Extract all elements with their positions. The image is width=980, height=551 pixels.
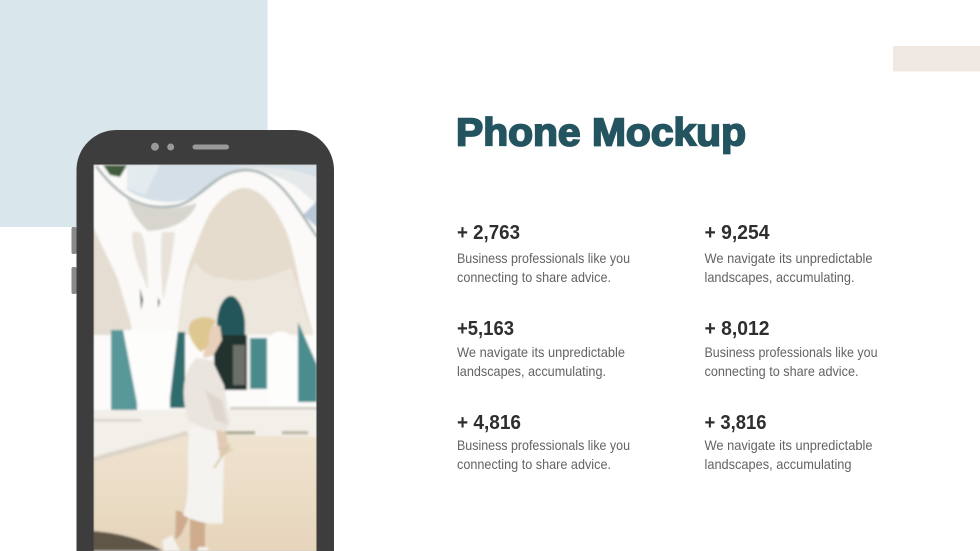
stat: +8,012: Business professionals like you xyxy=(704,345,878,360)
stat: +2,763 xyxy=(457,222,630,285)
dark arched doorway xyxy=(217,296,245,345)
stat: +9,254 xyxy=(704,222,872,285)
stat: +5,163: landscapes, accumulating. xyxy=(457,364,606,379)
right teal shutters xyxy=(250,338,267,389)
left teal shutters xyxy=(111,330,137,411)
white arch column strands xyxy=(132,232,175,300)
stat: +4,816 xyxy=(457,412,630,472)
main arch interior xyxy=(178,188,313,345)
stat: +5,163: +5,163 xyxy=(457,318,514,340)
sky and canopy xyxy=(127,165,318,205)
stat: +2,763: connecting to share advice. xyxy=(457,270,611,285)
arch lower wall xyxy=(179,264,312,335)
column overlay xyxy=(122,328,180,402)
woman's shoes xyxy=(162,535,180,551)
title: Phone Mockup xyxy=(456,112,746,154)
stat: +2,763: + 2,763 xyxy=(457,222,520,244)
door light xyxy=(233,345,245,385)
stat: +5,163: We navigate its unpredictable xyxy=(457,345,625,360)
stat: +3,816: landscapes, accumulating xyxy=(704,457,852,472)
photo: woman in front of white arches xyxy=(93,164,318,551)
stat: +3,816: + 3,816 xyxy=(704,412,766,434)
phone mockup xyxy=(72,130,334,551)
canopy underside xyxy=(127,198,197,231)
stat: +9,254: + 9,254 xyxy=(704,222,770,244)
phone camera and speaker xyxy=(151,143,229,151)
phone body xyxy=(76,130,334,551)
dark gaps beside column xyxy=(140,288,160,310)
sandy ground xyxy=(93,434,318,551)
stat: +3,816: We navigate its unpredictable xyxy=(704,438,872,453)
shadow xyxy=(93,531,163,551)
left arch interior xyxy=(94,228,132,336)
woman's neck and face xyxy=(203,326,222,358)
stat: +2,763: Business professionals like you xyxy=(457,251,630,266)
woman's skirt xyxy=(183,426,224,524)
stat: +9,254: landscapes, accumulating. xyxy=(704,270,854,285)
stat: +5,163 xyxy=(457,318,625,379)
plaza xyxy=(93,410,318,455)
stat: +4,816: Business professionals like you xyxy=(457,438,630,453)
woman's legs xyxy=(175,510,205,551)
woman's arm and hand xyxy=(216,430,229,458)
stat: +3,816 xyxy=(704,412,872,472)
decorative beige tab xyxy=(893,46,980,72)
phone side buttons xyxy=(72,227,76,294)
right arched wall xyxy=(272,331,289,336)
wall lower xyxy=(94,334,314,346)
stat: +8,012: connecting to share advice. xyxy=(704,364,858,379)
woman's sweater xyxy=(184,358,230,434)
decorative blue square xyxy=(0,0,268,227)
woman's hair xyxy=(189,317,216,352)
plants xyxy=(225,431,255,434)
stat: +9,254: We navigate its unpredictable xyxy=(704,251,872,266)
stat: +8,012 xyxy=(704,318,878,379)
stat: +4,816: + 4,816 xyxy=(457,412,521,434)
stat: +4,816: connecting to share advice. xyxy=(457,457,611,472)
stat: +8,012: + 8,012 xyxy=(704,318,770,340)
